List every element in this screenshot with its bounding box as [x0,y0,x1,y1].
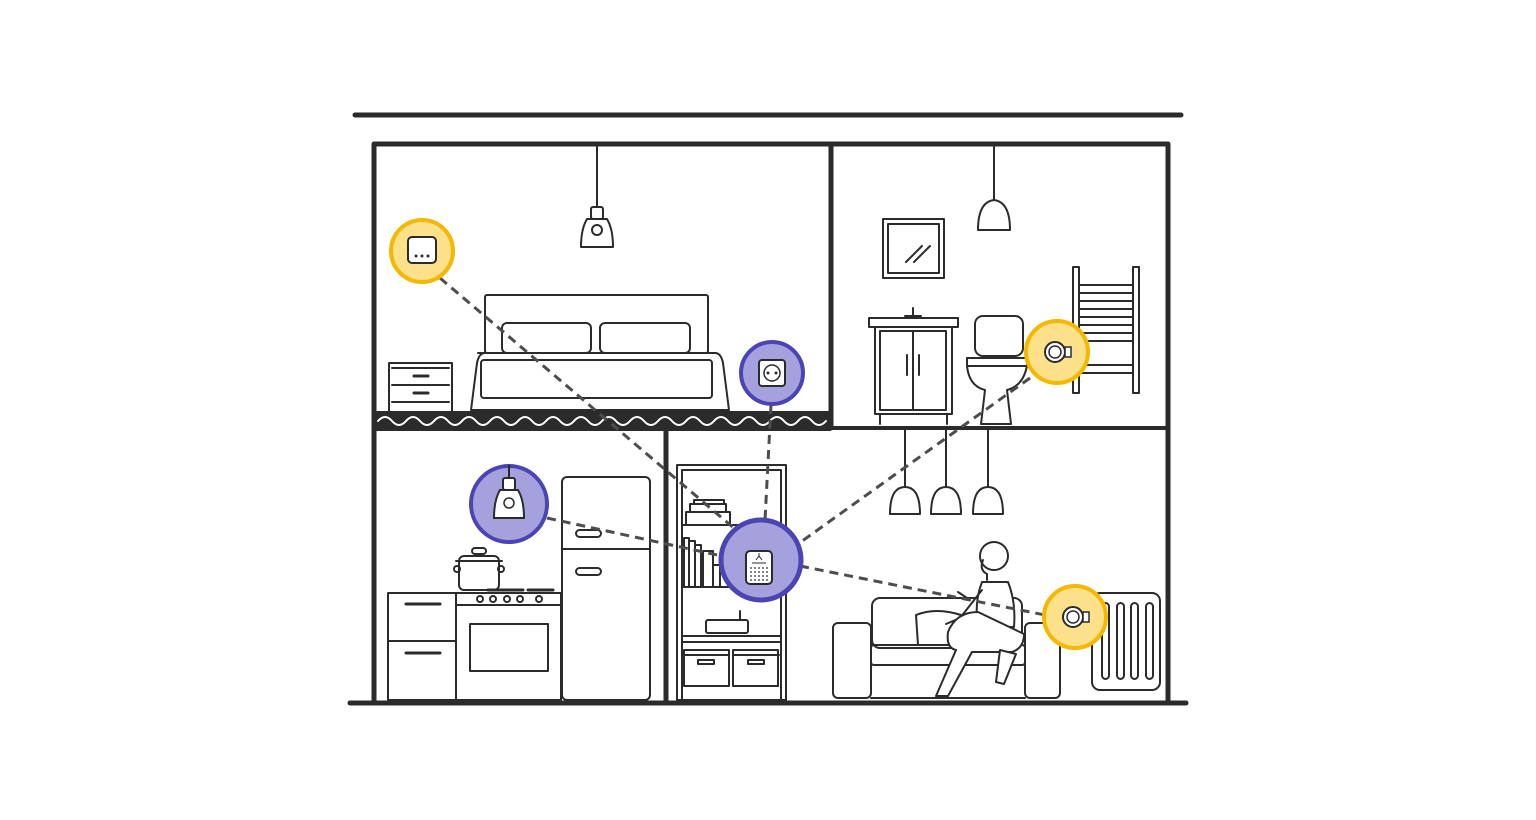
toilet [967,316,1027,424]
device: thermostat (yellow) [391,220,453,282]
device: smart socket (purple) [741,342,803,404]
bed [471,295,729,410]
roof line [355,112,1181,118]
dashed network lines [440,278,1045,615]
vanity [869,308,958,424]
house outline [374,144,1168,703]
stove [456,590,561,700]
radiator [1092,593,1160,690]
bedroom pendant lamp [581,147,613,247]
sofa [833,598,1060,698]
towel rail [1073,267,1139,393]
bathroom mirror [883,219,944,278]
bookshelf [677,465,786,700]
device: living room radiator valve (yellow) [1044,586,1106,648]
device: bathroom radiator valve (yellow) [1026,321,1088,383]
kitchen cabinet [388,593,456,700]
device: kitchen smart bulb (purple) [471,465,547,542]
bathroom pendant [978,147,1010,230]
cooking pot [454,548,504,590]
fridge [562,477,650,700]
living room pendants [890,430,1003,514]
device: smart speaker hub (purple) [721,520,801,600]
ground line [350,700,1186,706]
floor band with wave [374,411,831,431]
person [936,542,1024,696]
nightstand [389,363,452,413]
